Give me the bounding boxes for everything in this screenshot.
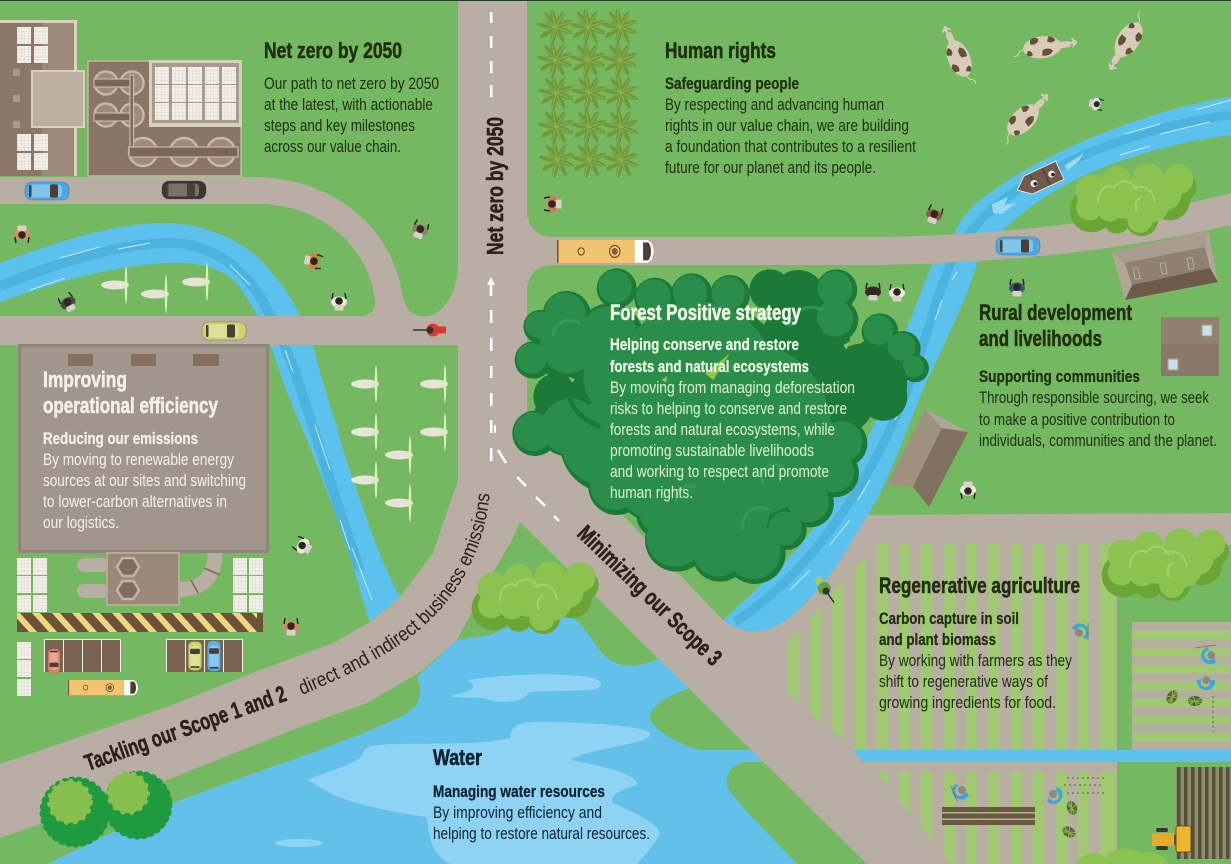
text block: human rights: Safeguarding people [665, 74, 799, 93]
road label: direct and indirect business emissions: direct and indirect business emissions [300, 494, 490, 694]
farm workers and crops [942, 623, 1220, 840]
regenerative field stripes [788, 540, 1117, 864]
turbines upper [101, 263, 210, 313]
heading text: net zero: across our value chain. [264, 137, 401, 156]
text block: forest positive strategy [610, 300, 855, 502]
text block: regenerative agriculture: Carbon capture in soil [879, 609, 1019, 628]
text block: human rights: By respecting and advancing human [665, 95, 884, 114]
top edge line [0, 0, 1231, 1]
cars on upper road [25, 181, 206, 200]
lake [47, 615, 797, 864]
palm plantation [537, 9, 639, 178]
text block: regenerative agriculture: By working with farmers as they [879, 651, 1072, 670]
forest [512, 268, 929, 584]
bush over road upper right [1070, 163, 1197, 236]
striped crop plot [1132, 622, 1231, 750]
text block: regenerative agriculture: growing ingredients for food. [879, 693, 1056, 712]
irrigation canal [853, 750, 1231, 762]
road label: net zero by 2050: Net zero by 2050 [482, 117, 508, 255]
road label: minimizing our scope 3: Minimizing our Scope 3 [573, 520, 727, 671]
road label: tackling our scope 1 and 2: Tackling our Scope 1 and 2 [81, 680, 290, 776]
text block: improving operational efficiency: Improving [43, 367, 127, 392]
bush at bottom edge [1077, 849, 1168, 864]
text block: rural development: to make a positive contribution to [979, 410, 1175, 429]
parking bays [44, 639, 243, 673]
upper left road [0, 177, 470, 345]
text block: water: helping to restore natural resources. [433, 824, 650, 843]
delivery truck in yard [68, 680, 138, 695]
ploughed field [1176, 767, 1231, 859]
solar panels by utility building [17, 558, 263, 696]
cows [935, 9, 1154, 148]
people [14, 97, 1104, 636]
hazard stripe barrier [17, 613, 263, 632]
text block: human rights: rights in our value chain, we are building [665, 116, 909, 135]
text block: rural development: Supporting communities [979, 367, 1140, 386]
text block: regenerative agriculture: shift to regenerative ways of [879, 672, 1048, 691]
truck on right road [557, 240, 654, 263]
right river [723, 97, 1231, 631]
cyclist on road [413, 324, 446, 336]
text block: forest positive strategy: Helping conserve and restore [610, 335, 799, 354]
text block: improving operational efficiency: Reducing our emissions [43, 429, 198, 448]
water highlights [275, 674, 660, 864]
barn by river [887, 409, 968, 507]
text block: improving operational efficiency: operational efficiency [43, 393, 219, 418]
text block: forest positive strategy: forests and natural ecosystems, while [610, 420, 835, 439]
text block: improving operational efficiency: sources at our sites and switching [43, 471, 246, 490]
text block: improving operational efficiency: to lower-carbon alternatives in [43, 492, 227, 511]
text block: rural development [979, 300, 1217, 450]
text block: improving operational efficiency: our logistics. [43, 513, 119, 532]
arrow on road [487, 277, 495, 296]
text block: forest positive strategy: and working to respect and promote [610, 462, 829, 481]
text block: regenerative agriculture [879, 573, 1080, 712]
blue car on right road [996, 237, 1040, 255]
bush top of regenerative area [1102, 528, 1229, 601]
text block: regenerative agriculture: Regenerative agriculture [879, 573, 1080, 598]
text block: regenerative agriculture: and plant biomass [879, 630, 996, 649]
yellow car [202, 322, 246, 340]
turbines lower [351, 365, 448, 522]
heading text: net zero: Net zero by 2050 [264, 38, 402, 63]
text block: human rights: a foundation that contributes to a resilient [665, 137, 916, 156]
house with skylights [1161, 317, 1219, 376]
utility building and pipes [77, 553, 220, 605]
text block: rural development: Rural development [979, 300, 1133, 325]
text block: improving operational efficiency: By moving to renewable energy [43, 450, 234, 469]
text block: improving operational efficiency [43, 367, 246, 532]
text block: water [433, 745, 650, 843]
text block: forest positive strategy: forests and natural ecosystems [610, 357, 809, 376]
text block: water: By improving efficiency and [433, 803, 602, 822]
heading text: net zero: at the latest, with actionable [264, 95, 433, 114]
tractor [1152, 826, 1191, 852]
left river [0, 223, 400, 622]
heading text: net zero [264, 38, 439, 156]
text block: forest positive strategy: human rights. [610, 483, 693, 502]
panel: improving operational efficiency building [20, 346, 268, 552]
factory building left [0, 20, 84, 176]
text block: rural development: and livelihoods [979, 326, 1102, 351]
round shrubs [43, 773, 169, 844]
text block: water: Managing water resources [433, 782, 605, 801]
right road [520, 193, 1231, 285]
heading text: net zero: steps and key milestones [264, 116, 415, 135]
text block: forest positive strategy: promoting sustainable livelihoods [610, 441, 814, 460]
cyclist on regenerative road [811, 574, 839, 606]
bush near lake [472, 561, 599, 634]
text block: human rights [665, 38, 916, 177]
text block: water: Water [433, 745, 482, 770]
text block: forest positive strategy: By moving from managing deforestation [610, 378, 855, 397]
text block: human rights: future for our planet and its people. [665, 158, 876, 177]
boat [1013, 161, 1064, 199]
text block: forest positive strategy: risks to helping to conserve and restore [610, 399, 847, 418]
text block: human rights: Human rights [665, 38, 776, 63]
heading text: net zero: Our path to net zero by 2050 [264, 74, 439, 93]
right green plot [1117, 545, 1231, 864]
treatment plant building [88, 60, 242, 176]
barn top right [1112, 230, 1218, 300]
road markings [490, 12, 559, 521]
text block: forest positive strategy: Forest Positive strategy [610, 300, 802, 325]
